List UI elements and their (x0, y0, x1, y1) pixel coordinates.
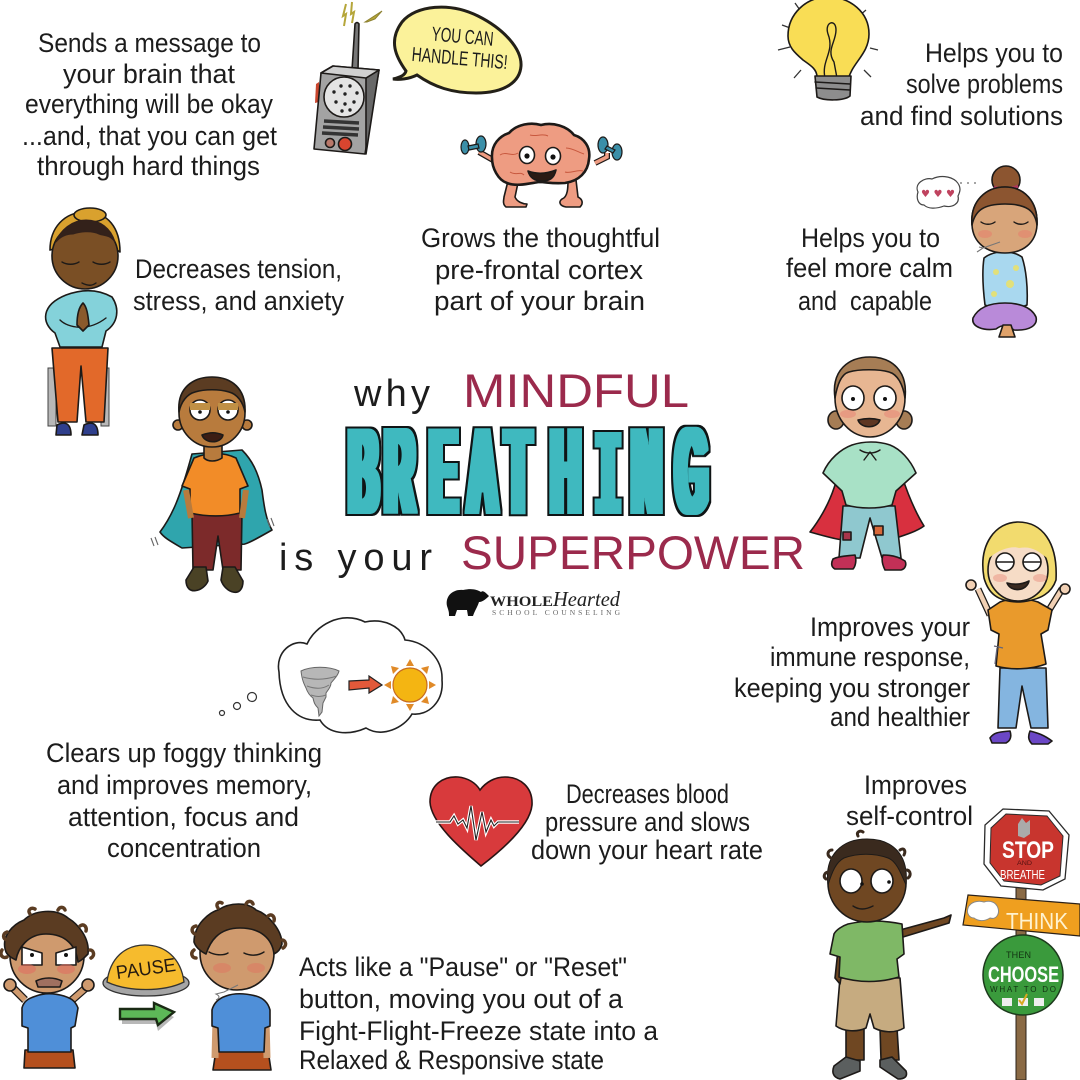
text: clears up foggy thinking: and improves memory, (57, 770, 312, 800)
text: grows the pre-frontal cortex: part of your brain (434, 286, 645, 316)
stop sign: AND (1017, 861, 1033, 867)
text: acts like a pause or reset button: Acts like a "Pause" or "Reset" (299, 952, 627, 982)
title line: why mindful: why (353, 373, 430, 415)
title word: breathing: E (430, 404, 457, 540)
illustration: superhero girl with red cape (810, 357, 924, 570)
title word: breathing (349, 404, 707, 551)
title word: breathing: G (676, 404, 707, 540)
stop sign: STOP (1002, 837, 1054, 864)
logo: wholehearted school counseling (447, 587, 621, 617)
icon: pause button: PAUSE (115, 955, 177, 984)
title: why mindful breathing is your superpower (279, 364, 805, 579)
title line: why mindful (353, 364, 689, 417)
text: helps you solve problems: Helps you to (925, 38, 1063, 68)
text: acts like a pause or reset button (299, 952, 659, 1075)
logo: wholehearted school counseling: WHOLE (490, 594, 553, 610)
text: improves your immune response: immune response, (770, 642, 970, 672)
icon: pause button (103, 945, 189, 996)
text: decreases blood pressure (531, 779, 763, 865)
text: decreases blood pressure: pressure and slows (545, 807, 750, 837)
icon: exercising brain with dumbbells (461, 124, 622, 207)
text: grows the pre-frontal cortex: pre-frontal cortex (435, 255, 643, 285)
text: sends a message to your brain (22, 28, 277, 181)
title line: why mindful: MINDFUL (463, 364, 689, 417)
text: clears up foggy thinking: Clears up foggy thinking (46, 738, 322, 768)
text: improves self-control: Improves (864, 770, 967, 800)
text: clears up foggy thinking (46, 738, 322, 863)
illustration: superhero boy with teal cape (151, 377, 274, 592)
text: sends a message to your brain: your brain that (63, 59, 235, 89)
title word: breathing: R (385, 404, 414, 540)
text: sends a message to your brain: through hard things (37, 151, 260, 181)
text: decreases blood pressure: Decreases blood (566, 779, 729, 809)
title word: breathing: H (551, 404, 580, 540)
illustration: blonde girl flexing (966, 522, 1070, 744)
stop sign: BREATHE (1000, 867, 1045, 882)
illustration: meditating girl with heart thought: ♥♥♥ (921, 189, 955, 200)
text: grows the pre-frontal cortex: Grows the thoughtful (421, 223, 660, 253)
text: acts like a pause or reset button: Fight-Flight-Freeze state into a (299, 1016, 659, 1046)
text: helps you feel calm (786, 223, 953, 316)
title word: breathing: A (468, 404, 497, 540)
choose sign (983, 935, 1063, 1015)
text: helps you solve problems: and find solutions (860, 101, 1063, 131)
text: acts like a pause or reset button: Relaxed & Responsive state (299, 1045, 604, 1075)
icon: red heart with pulse line (430, 777, 532, 866)
text: improves your immune response (734, 612, 970, 732)
text: decreases tension (133, 254, 344, 316)
text: clears up foggy thinking: concentration (107, 833, 261, 863)
text: decreases tension: Decreases tension, (135, 254, 342, 284)
illustration: seated child with praying hands (46, 208, 120, 435)
text: improves self-control: self-control (846, 801, 973, 831)
text: sends a message to your brain: everything will be okay (25, 89, 273, 119)
logo: wholehearted school counseling: SCHOOL COUNSELING (492, 608, 621, 617)
text: improves your immune response: and healthier (830, 702, 970, 732)
text: improves self-control (846, 770, 973, 831)
illustration: angry boy (1, 907, 94, 1068)
illustration: meditating girl with heart thought (917, 166, 1037, 337)
arrow: green arrow to relaxed state (120, 1003, 174, 1031)
text: clears up foggy thinking: attention, focus and (68, 802, 299, 832)
title line: is your superpower: SUPERPOWER (461, 526, 805, 579)
illustration: calm boy breathing (192, 901, 286, 1070)
text: helps you feel calm: feel more calm (786, 253, 953, 283)
icon: black bear (447, 589, 489, 616)
text: sends a message to your brain: ...and, that you can get (22, 121, 277, 151)
icon: stop think choose signs (963, 809, 1080, 1080)
choose sign: WHAT TO DO (990, 985, 1056, 994)
title word: breathing: T (506, 404, 530, 540)
title word: breathing: B (349, 404, 378, 540)
icon: walkie-talkie radio (314, 2, 382, 154)
title word: breathing: N (632, 404, 661, 540)
stop sign (984, 809, 1069, 890)
text: decreases blood pressure: down your heart rate (531, 835, 763, 865)
callout: you can handle this speech bubble: YOU CAN (431, 23, 494, 51)
logo: wholehearted school counseling: Hearted (552, 587, 620, 611)
choose sign: THEN (1006, 950, 1031, 960)
sign post (1016, 885, 1026, 1080)
icon: thought cloud with tornado turning into sun (220, 618, 442, 733)
callout: you can handle this speech bubble: HANDLE THIS! (411, 44, 508, 74)
text: decreases tension: stress, and anxiety (133, 286, 344, 316)
text: helps you feel calm: and capable (798, 286, 932, 316)
text: grows the pre-frontal cortex (421, 223, 660, 316)
callout: you can handle this speech bubble (393, 7, 521, 93)
think sign (963, 895, 1080, 936)
title word: breathing: I (596, 412, 620, 551)
text: improves your immune response: keeping you stronger (734, 673, 970, 703)
text: helps you feel calm: Helps you to (801, 223, 940, 253)
text: helps you solve problems (860, 38, 1063, 131)
title line: is your superpower: is your (279, 537, 432, 579)
text: improves your immune response: Improves your (810, 612, 970, 642)
illustration: boy pointing at signs (824, 831, 951, 1079)
title line: is your superpower (279, 526, 805, 579)
icon: lightbulb (778, 0, 878, 100)
think sign: THINK (1006, 908, 1069, 934)
text: acts like a pause or reset button: button, moving you out of a (299, 984, 624, 1014)
text: sends a message to your brain: Sends a message to (38, 28, 261, 58)
